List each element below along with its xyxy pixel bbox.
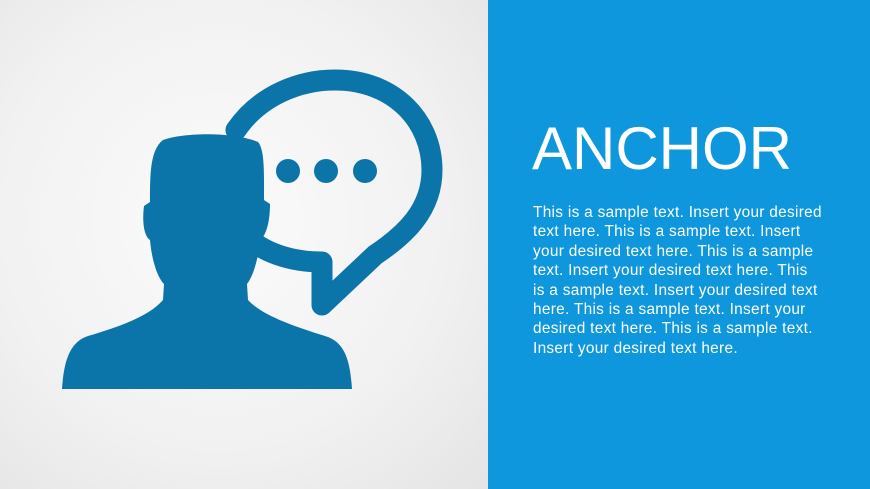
text block: text here. This is a sample text. Insert (533, 223, 800, 240)
background: left light area (0, 0, 488, 489)
text block: is a sample text. Insert your desired text (533, 282, 818, 299)
text block: your desired text here. This is a sample (533, 243, 813, 260)
icon: speech bubble (236, 80, 432, 305)
text block: here. This is a sample text. Insert your (533, 301, 806, 318)
text block (533, 204, 822, 357)
icon: person silhouette (62, 134, 352, 389)
text block: Insert your desired text here. (533, 340, 738, 357)
icon: person with speech bubble (62, 70, 442, 389)
text block: This is a sample text. Insert your desired (533, 204, 822, 221)
text block: text. Insert your desired text here. This (533, 262, 808, 279)
panel: right blue (488, 0, 870, 489)
text block: desired text here. This is a sample text. (533, 320, 813, 337)
icon: dots (276, 159, 377, 183)
heading: ANCHOR (532, 115, 792, 182)
